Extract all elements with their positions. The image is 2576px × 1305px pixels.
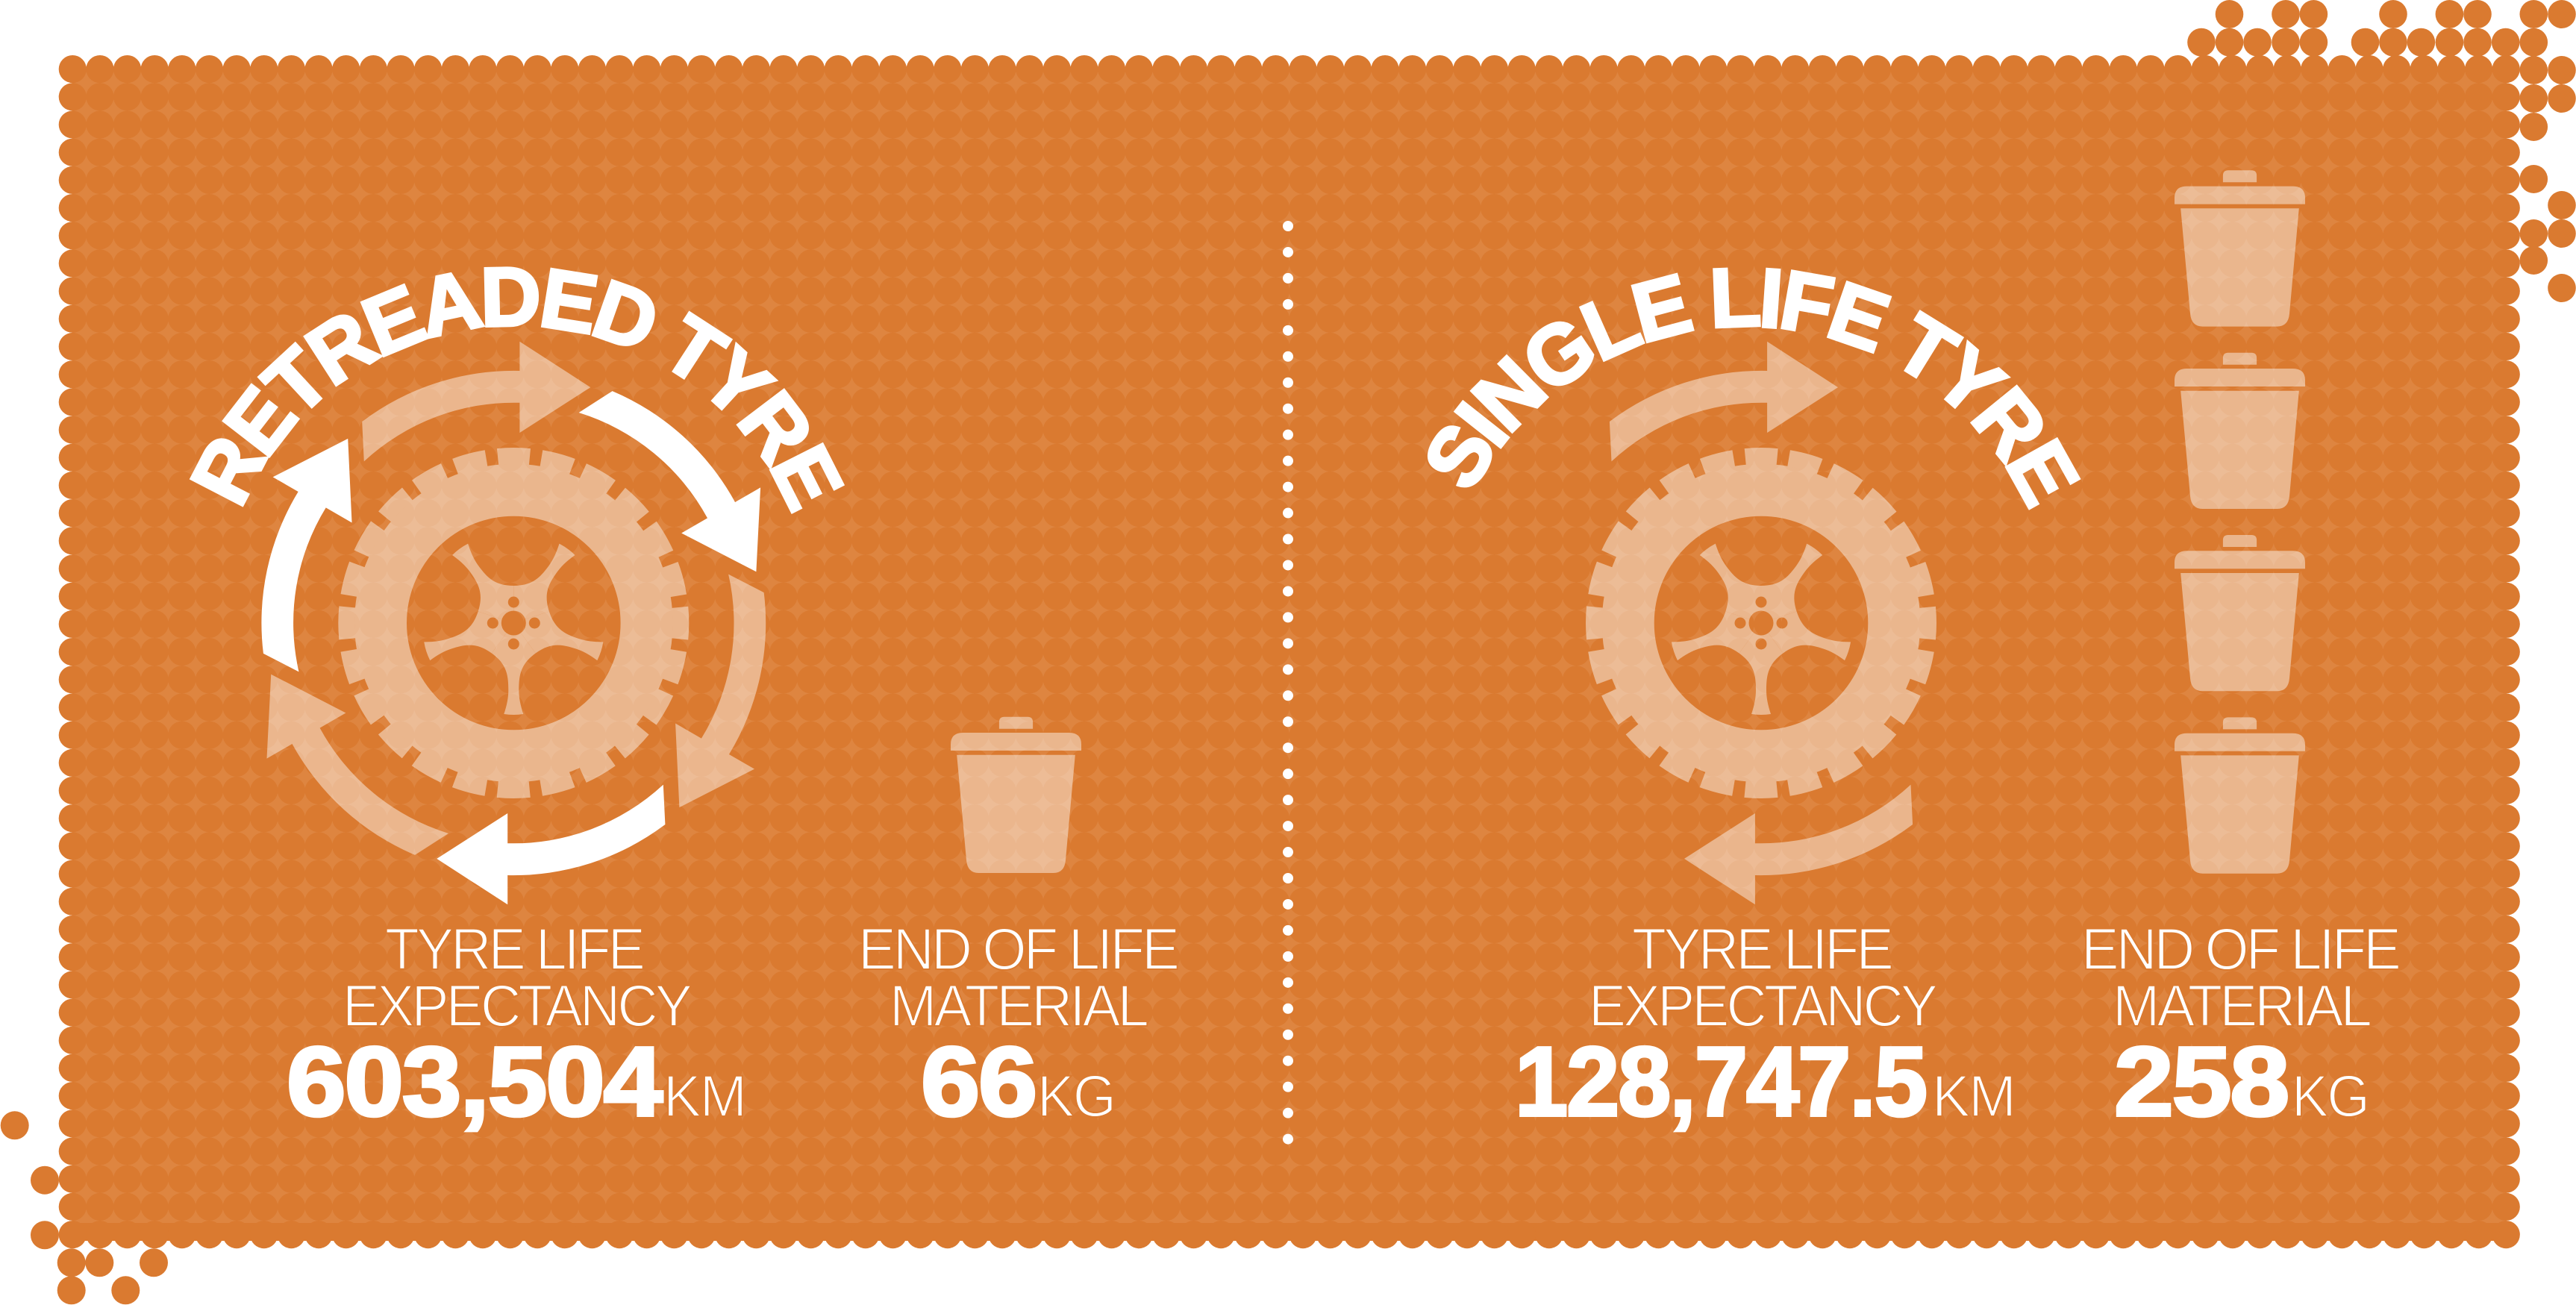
heading: retreaded tyre: RETREADED TYRE [190, 266, 845, 514]
stat: tyre life expectancy: TYRE LIFE [385, 916, 643, 982]
icon: stacked bins [2175, 170, 2305, 874]
icon: bin [951, 717, 1081, 873]
panel: single life tyre [1427, 170, 2399, 1136]
stat: tyre life expectancy [287, 916, 745, 1136]
stat: tyre life expectancy [1515, 916, 2015, 1136]
stat: end of life material: 66 [921, 1027, 1036, 1136]
scattered dots: top right [2187, 0, 2576, 302]
stat: end of life material: KG [2292, 1063, 2369, 1129]
stat: end of life material [858, 916, 1178, 1136]
stat: tyre life expectancy: EXPECTANCY [343, 972, 691, 1039]
stat: tyre life expectancy: 128,747.5 [1515, 1027, 1926, 1136]
stat: end of life material: 258 [2114, 1027, 2288, 1136]
stat: tyre life expectancy: KM [663, 1063, 745, 1129]
panel: retreaded tyre [190, 266, 1178, 1136]
stat: tyre life expectancy: TYRE LIFE [1632, 916, 1892, 982]
scattered dots: bottom left [1, 1111, 168, 1304]
stat: end of life material: MATERIAL [890, 972, 1148, 1039]
stat: tyre life expectancy: KM [1932, 1063, 2015, 1129]
heading: single life tyre: SINGLE LIFE TYRE [1427, 267, 2081, 510]
divider: dotted line [1283, 226, 1293, 1139]
cycle arrows: retreaded [194, 342, 834, 904]
stat: tyre life expectancy: 603,504 [287, 1027, 663, 1136]
stat: end of life material: END OF LIFE [2081, 916, 2399, 982]
stat: end of life material: END OF LIFE [858, 916, 1178, 982]
stat: end of life material [2081, 916, 2399, 1136]
stat: tyre life expectancy: EXPECTANCY [1589, 972, 1936, 1039]
arrows: single pass [1610, 342, 1913, 904]
stat: end of life material: MATERIAL [2113, 972, 2371, 1039]
stat: end of life material: KG [1037, 1063, 1115, 1129]
icon: tyre [346, 456, 681, 790]
icon: tyre [1594, 456, 1928, 790]
